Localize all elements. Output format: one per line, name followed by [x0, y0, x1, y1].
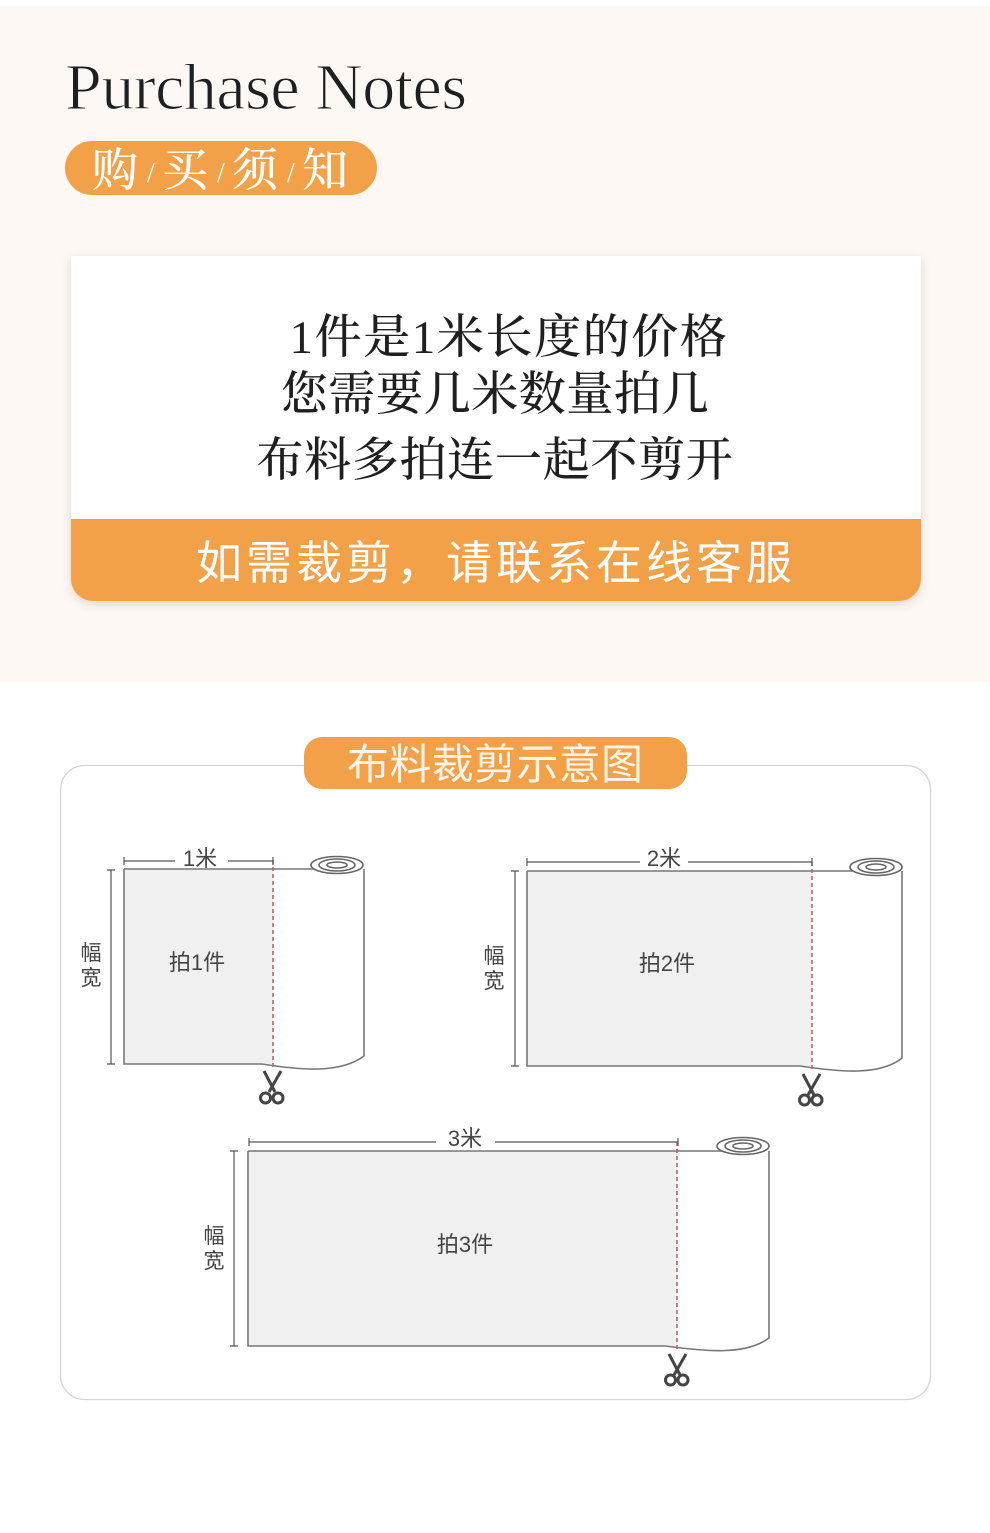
text: price per metre: 1件是1米长度的价格 [290, 312, 728, 364]
diagram: 1 metre [80, 846, 364, 1103]
diagram: 2 metres: 2米 [647, 846, 681, 871]
cut line [272, 860, 274, 1070]
diagram: 3 metres: 3米 [448, 1126, 482, 1151]
badge: 购买须知: / [287, 158, 295, 189]
roll [850, 858, 902, 876]
diagram: 3 metres [204, 1126, 769, 1385]
badge: 购买须知: 知 [302, 145, 348, 196]
heading: Purchase Notes: Purchase Notes [65, 52, 467, 124]
panel: purchase notes background [0, 6, 990, 682]
heading: 布料裁剪示意图: 布料裁剪示意图 [347, 731, 643, 792]
badge: 购买须知: 买 [162, 145, 208, 196]
panel: notice card [71, 256, 921, 601]
icon: scissors [260, 1071, 283, 1103]
roll [311, 856, 363, 874]
diagram: 1 metre: 幅 [80, 942, 102, 965]
roll [717, 1138, 769, 1154]
diagram: 2 metres: 宽 [484, 970, 504, 993]
badge: 购买须知: / [217, 158, 225, 189]
text: uncut fabric: 布料多拍连一起不剪开 [256, 435, 734, 487]
diagram: 1 metre: 拍1件 [169, 950, 225, 975]
width dimension [107, 857, 273, 1064]
diagram: 1 metre: 1米 [183, 846, 217, 871]
diagram: 3 metres: 宽 [204, 1250, 224, 1273]
text: quantity instruction: 您需要几米数量拍几 [281, 369, 709, 421]
diagram: 2 metres: 拍2件 [639, 951, 695, 976]
banner: contact for cutting [71, 519, 921, 601]
diagram: 2 metres [484, 846, 902, 1105]
diagram frame [60, 766, 930, 1400]
width dimension [511, 858, 812, 1066]
diagram: 2 metres: 幅 [484, 945, 504, 968]
icon: scissors [666, 1354, 688, 1385]
badge: 购买须知: / [147, 158, 155, 189]
banner: contact for cutting: 如需裁剪，请联系在线客服 [196, 527, 796, 593]
badge: 购买须知: 购 [92, 145, 138, 196]
cut line [676, 1142, 678, 1352]
diagram: 3 metres: 幅 [204, 1225, 224, 1248]
width dimension [230, 1138, 678, 1346]
badge: 购买须知: 须 [232, 145, 278, 196]
diagram: 3 metres: 拍3件 [437, 1232, 493, 1257]
diagram: 1 metre: 宽 [80, 967, 102, 990]
icon: scissors [800, 1074, 822, 1105]
badge: 购买须知 [65, 141, 377, 195]
cut line [811, 862, 813, 1072]
